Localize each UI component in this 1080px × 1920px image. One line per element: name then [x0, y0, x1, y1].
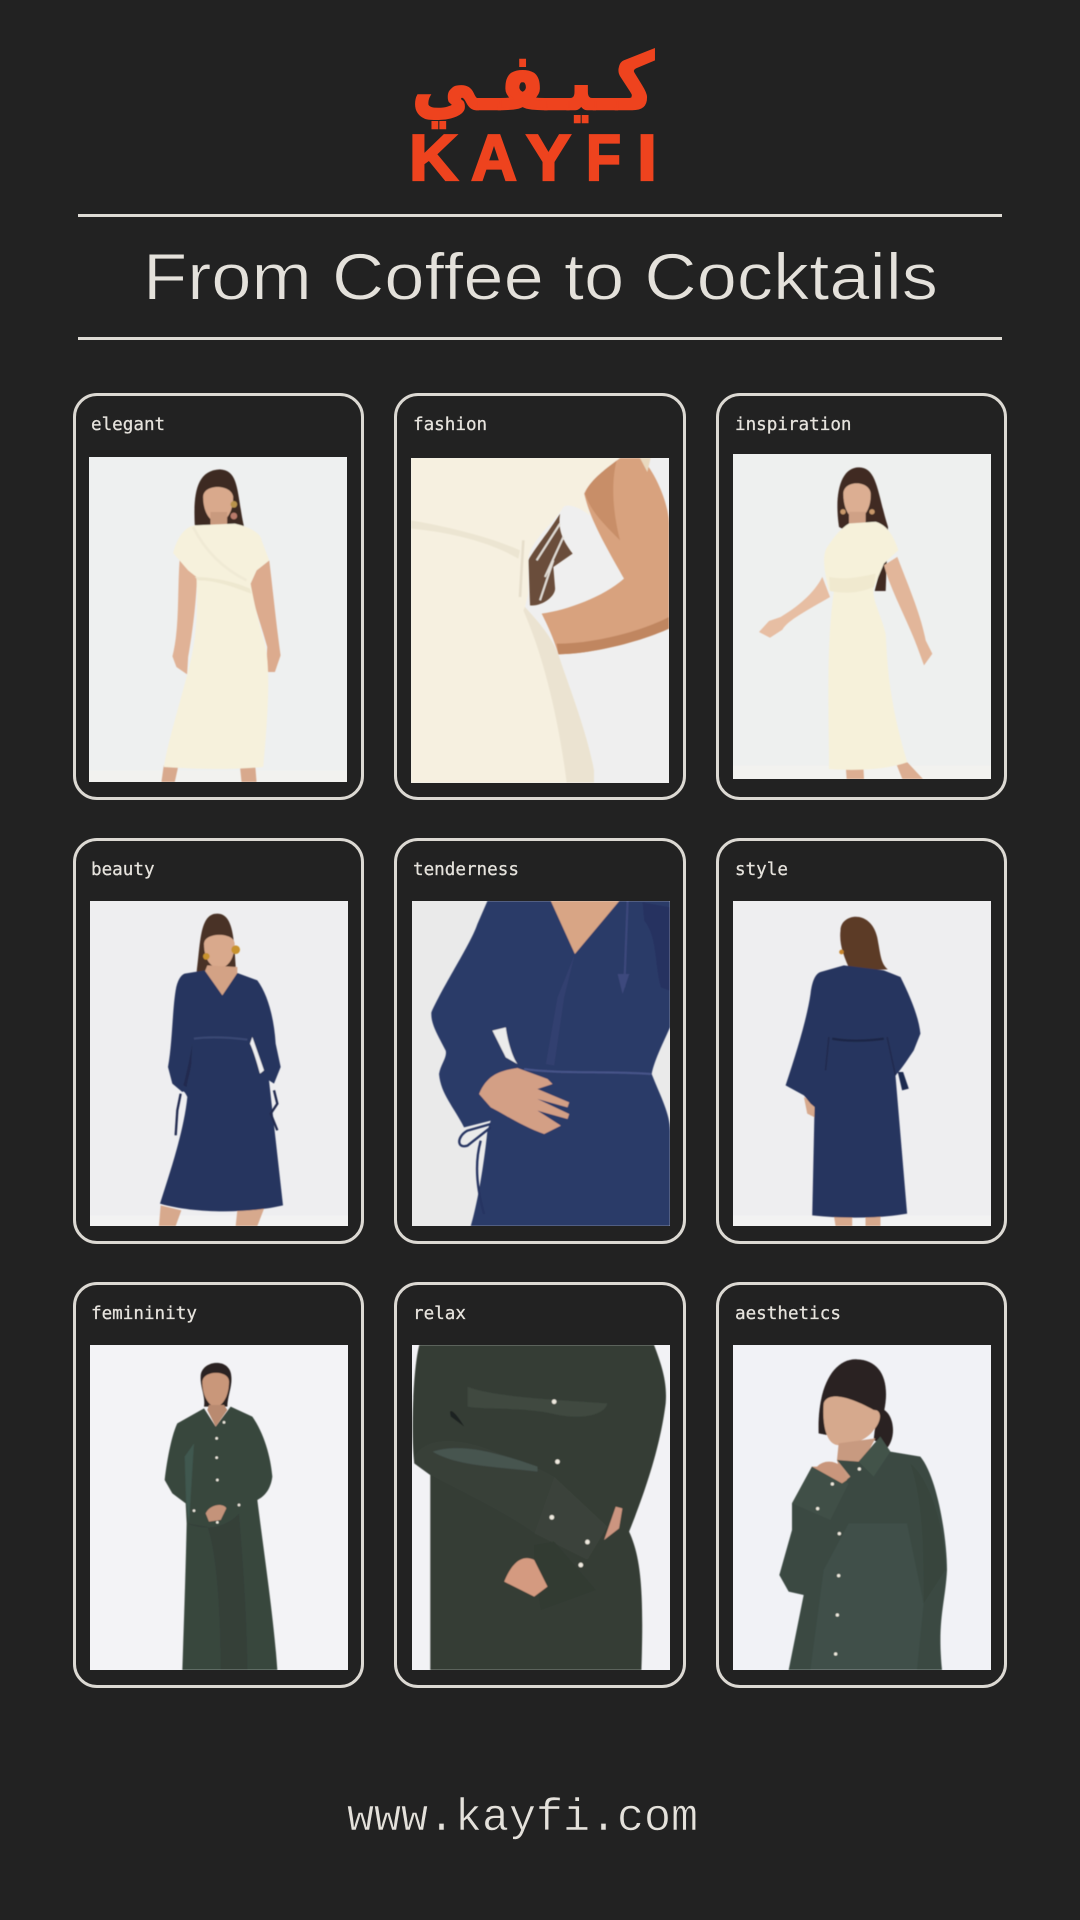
- logo: KAYFI Arabic and Latin wordmark: [409, 38, 657, 194]
- title: From Coffee to Cocktails: [143, 240, 938, 314]
- panel: relax: [394, 1282, 686, 1688]
- photo: model in cream dress, front view: [89, 457, 347, 782]
- panel: style: [716, 838, 1007, 1244]
- photo: model portrait in dark green shirt: [733, 1345, 991, 1670]
- logo: KAYFI Arabic and Latin wordmark: Y: [526, 121, 571, 194]
- label: tenderness: tenderness: [413, 860, 519, 880]
- label: femininity: femininity: [91, 1304, 197, 1324]
- panel: beauty: [73, 838, 364, 1244]
- logo: KAYFI Arabic and Latin wordmark: كـيـفـي: [412, 38, 655, 128]
- footer: website URL: www.kayfi.com: [347, 1793, 698, 1844]
- panel: inspiration: [716, 393, 1007, 800]
- photo: navy dress, back view: [733, 901, 991, 1226]
- photo: dress waist and arm close-up: [411, 458, 669, 783]
- panel: femininity: [73, 1282, 364, 1688]
- panel: elegant: [73, 393, 364, 800]
- photo: navy dress close-up with hand at waist: [412, 901, 670, 1226]
- photo: model in cream dress, walking: [733, 454, 991, 779]
- photo: model in navy dress, front view: [90, 901, 348, 1226]
- logo: KAYFI Arabic and Latin wordmark: K: [409, 121, 458, 194]
- label: relax: relax: [413, 1304, 466, 1324]
- label: aesthetics: aesthetics: [735, 1304, 841, 1324]
- panel: tenderness: [394, 838, 686, 1244]
- logo: KAYFI Arabic and Latin wordmark: F: [586, 121, 621, 194]
- photo: dark green dress close-up with cuffs: [412, 1345, 670, 1670]
- label: beauty: beauty: [91, 860, 155, 880]
- panel: fashion: [394, 393, 686, 800]
- logo: KAYFI Arabic and Latin wordmark: I: [637, 121, 657, 194]
- label: fashion: fashion: [413, 415, 487, 435]
- label: elegant: elegant: [91, 415, 165, 435]
- logo: KAYFI Arabic and Latin wordmark: A: [471, 121, 517, 194]
- panel: aesthetics: [716, 1282, 1007, 1688]
- photo: model in dark green shirt dress: [90, 1345, 348, 1670]
- label: style: style: [735, 860, 788, 880]
- label: inspiration: inspiration: [735, 415, 852, 435]
